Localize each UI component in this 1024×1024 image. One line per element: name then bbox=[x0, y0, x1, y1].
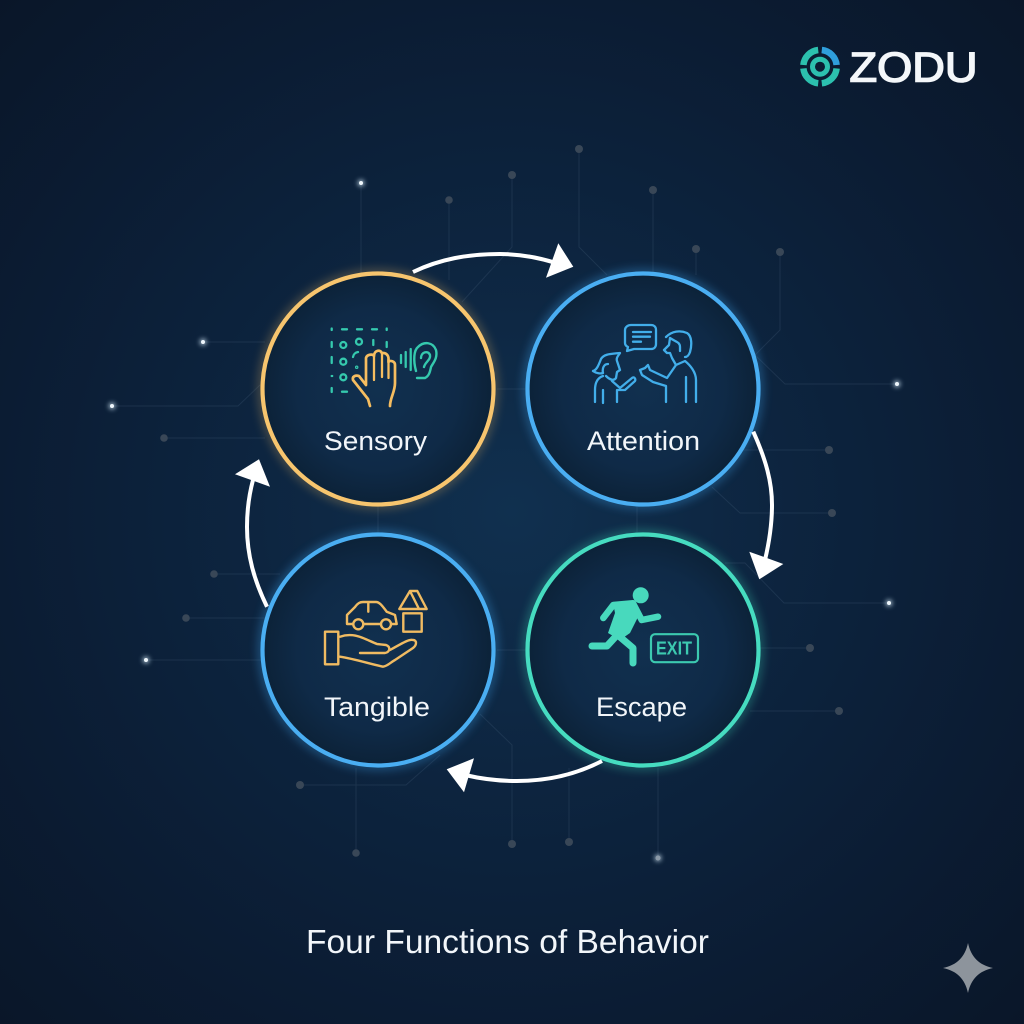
panel: escape bbox=[527, 534, 759, 766]
icon: dots, hand and ear bbox=[332, 328, 436, 406]
label: Sensory bbox=[324, 426, 428, 456]
icon: sparkle bbox=[943, 943, 993, 993]
arrow: attention to escape bbox=[749, 432, 783, 579]
panel: tangible bbox=[262, 534, 494, 766]
icon: two people talking bbox=[593, 325, 696, 403]
logo icon bbox=[803, 50, 837, 83]
icon: hand holding car and block bbox=[325, 591, 427, 667]
network nodes bbox=[108, 145, 900, 862]
logo bbox=[803, 44, 978, 90]
title: Four Functions of Behavior bbox=[306, 923, 709, 960]
icon: running figure and exit sign: EXIT bbox=[656, 638, 692, 658]
label: Attention bbox=[587, 426, 700, 456]
icon: running figure and exit sign bbox=[592, 587, 698, 663]
arrow: escape to tangible bbox=[447, 758, 602, 792]
arrow: sensory to attention bbox=[413, 243, 573, 278]
panel: attention bbox=[527, 273, 759, 505]
label: Tangible bbox=[324, 692, 430, 722]
logo wordmark: ZODU bbox=[850, 44, 978, 90]
arrow: tangible to sensory bbox=[235, 459, 270, 607]
label: Escape bbox=[596, 692, 687, 722]
panel: sensory bbox=[262, 273, 494, 505]
